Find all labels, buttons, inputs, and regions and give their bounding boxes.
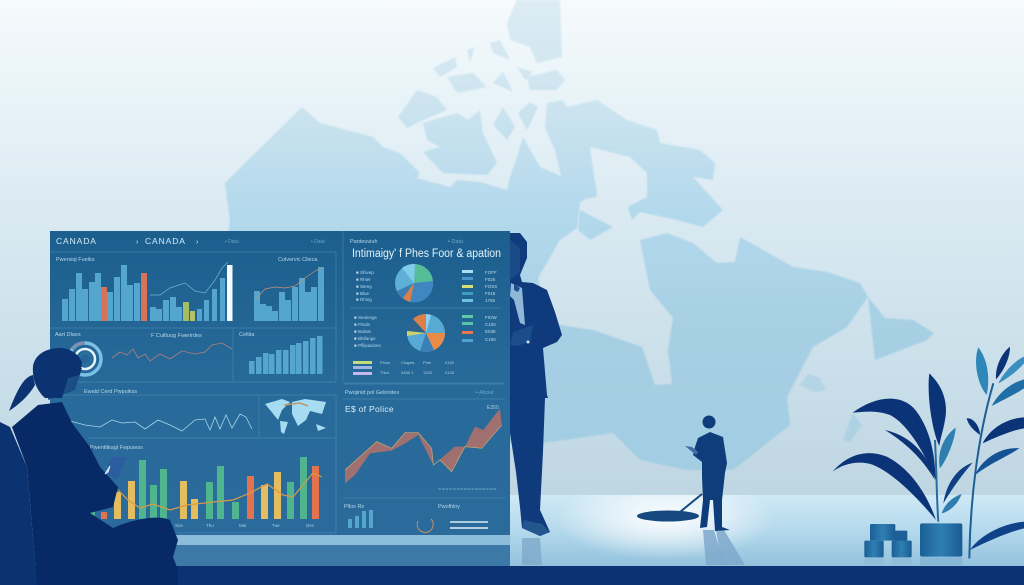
pie legend right: FIOW — [485, 315, 497, 320]
area chart — [345, 408, 502, 489]
mini gauge — [417, 519, 433, 533]
striped table: Phiue — [380, 360, 391, 365]
dashboard header: ▪ Data — [311, 239, 325, 245]
chart titles: Pwersiqi Fueiks — [56, 257, 95, 263]
pie chart two — [407, 314, 445, 352]
dashboard header: CANADA — [145, 236, 186, 246]
signal wave line — [70, 414, 252, 431]
panel small values: E350 — [487, 405, 499, 411]
panel reflection strip — [47, 535, 510, 566]
lower chart axis labels — [93, 523, 315, 528]
pie legend right: FOSS — [485, 284, 497, 289]
pie legend right: C106 — [485, 337, 496, 342]
dashboard header: › — [196, 239, 199, 246]
bottom band — [0, 566, 1024, 585]
lower chart axis labels: Pret — [125, 523, 134, 528]
pie legend right: 1765 — [485, 298, 496, 303]
mini bar chart — [348, 510, 373, 528]
area chart title: E$ of Police — [345, 404, 394, 414]
dashboard panel — [50, 231, 510, 535]
pie legend right: C106 — [485, 322, 496, 327]
chart titles: Aart Dlaes — [55, 332, 81, 338]
infographic heading: Intimaigy' f Phes Foor & apation — [352, 248, 501, 260]
pie one legend left: ■ Steng — [356, 284, 372, 289]
chart titles — [55, 239, 494, 510]
pie one legend left: ■ Blue — [356, 291, 369, 296]
chart titles: F Cuiltuug Fwerirdes — [151, 333, 202, 339]
chart titles: Ewald Cerd Pwpuikss — [84, 389, 137, 395]
lower chart axis labels: Sun — [175, 523, 184, 528]
progress bars — [450, 522, 488, 528]
pie one legend left: ■ Shivep — [356, 270, 374, 275]
pie two legend left: ■ Seulongs — [354, 315, 377, 320]
dashboard header: CANADA — [56, 236, 97, 246]
pie legend right — [462, 270, 497, 342]
lower chart trend line — [118, 473, 322, 510]
section frames — [50, 231, 505, 533]
pie one legend left: ■ Dhing — [356, 297, 372, 302]
pie legend right: F025 — [485, 277, 496, 282]
map of Canada — [220, 0, 934, 470]
chart titles: ▪ Data — [448, 239, 464, 245]
pie legend right: E038 — [485, 329, 496, 334]
pie chart one — [395, 264, 433, 302]
chart titles: Pwojinid pol Gelonites — [345, 390, 399, 396]
pie two legend left: ■ Pisals — [354, 322, 371, 327]
pie one legend left — [356, 270, 374, 302]
pie legend right: F018 — [485, 291, 496, 296]
striped table: Phei — [423, 360, 431, 365]
chart titles: Celtiia — [239, 332, 255, 338]
striped table: 1325 — [423, 370, 433, 375]
dashboard header: ▪ Data — [225, 239, 239, 245]
middle line chart — [112, 343, 232, 361]
pie two legend left: ■ Pfilipasines — [354, 343, 381, 348]
striped table: Clugals — [401, 360, 414, 365]
pie two legend left: ■ Boleat — [354, 329, 371, 334]
chart titles: ▪ About — [476, 390, 494, 396]
donut chart — [69, 343, 101, 375]
lower chart axis labels: Thur — [93, 523, 103, 528]
striped table: 0125 — [445, 370, 455, 375]
striped table: 0150 — [445, 360, 455, 365]
dashboard header — [56, 236, 325, 246]
lower chart axis labels: Tue — [272, 523, 280, 528]
small standing man with shadow — [637, 416, 745, 565]
chart titles: Pwolhlny — [438, 504, 460, 510]
pie two legend left: ■ Bhifangs — [354, 336, 376, 341]
floor — [34, 495, 1024, 566]
pie one legend left: ■ Rhier — [356, 277, 371, 282]
right chart trend line — [256, 268, 322, 299]
plants and pot — [833, 347, 1024, 565]
right bar chart — [254, 267, 324, 321]
pie legend right: FOFF — [485, 270, 497, 275]
striped table — [353, 360, 455, 375]
lower colour bar chart — [89, 457, 319, 519]
main chart trend line — [150, 262, 228, 295]
dashboard header: › — [136, 239, 139, 246]
chart titles: Pllos Rx — [344, 504, 364, 510]
lower chart axis labels: Mar — [239, 523, 247, 528]
chart titles: Colvervic Clieca — [278, 257, 318, 263]
lower chart axis labels: Thu — [206, 523, 214, 528]
striped table: Thlut — [380, 370, 390, 375]
striped table: 0458 1 — [401, 370, 414, 375]
lower chart axis labels: Dec — [306, 523, 315, 528]
chart titles: Pwenttikagl Fwpuiess — [90, 445, 143, 451]
small bar chart — [249, 336, 322, 374]
seated woman silhouette — [0, 348, 178, 585]
main bar chart — [62, 265, 232, 321]
chart titles: Panteuviuh — [350, 239, 378, 245]
presenter silhouette — [505, 233, 562, 565]
world map — [265, 399, 326, 434]
pie two legend left — [354, 315, 381, 348]
